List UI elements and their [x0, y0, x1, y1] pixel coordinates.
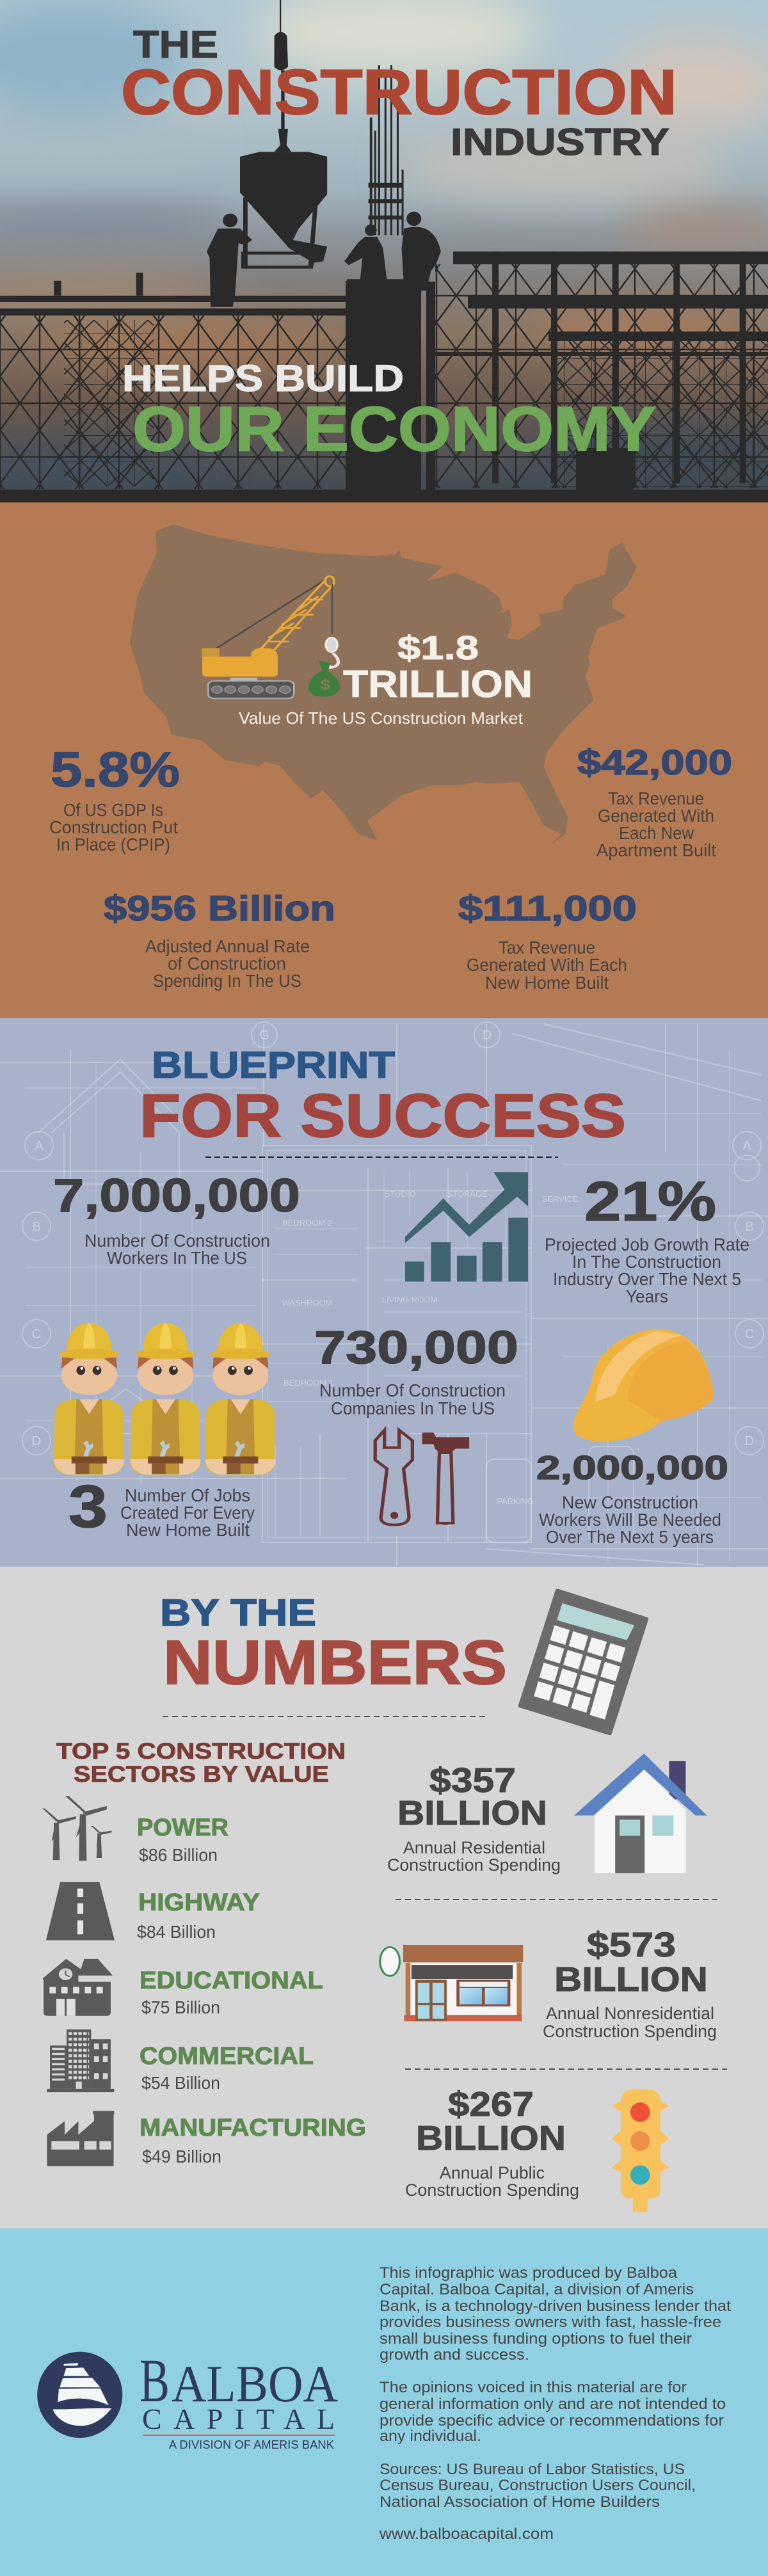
text block: about: growth and success. — [380, 2346, 529, 2364]
stat: jobs per new home: 3 — [68, 1473, 108, 1540]
stat: public spending: BILLION — [416, 2119, 566, 2157]
icon: factory — [47, 2111, 114, 2166]
stat: $111,000: Tax Revenue — [499, 938, 595, 957]
stat: jobs per new home: Created For Every — [120, 1503, 255, 1523]
stat: $42,000 — [577, 742, 732, 860]
subtitle: helps build: HELPS BUILD — [122, 358, 404, 399]
stat: job growth rate: In The Construction — [572, 1252, 721, 1272]
grid labels: D — [483, 1028, 492, 1043]
stat: $956 billion: of Construction — [168, 954, 286, 973]
heading: blueprint: BLUEPRINT — [152, 1044, 395, 1086]
text block: disclaimer: provide specific advice or recommendations for — [380, 2412, 724, 2429]
sector: power: POWER — [137, 1814, 228, 1841]
stat: residential spending: $357 — [429, 1761, 516, 1800]
stat: construction companies — [314, 1322, 518, 1418]
text block: disclaimer — [380, 2379, 726, 2445]
grid labels: SERVICE — [542, 1194, 579, 1204]
stat: nonresidential spending: Annual Nonresidential — [546, 2004, 714, 2023]
stat: $956 billion: $956 Billion — [104, 888, 335, 928]
grid labels: B — [745, 1220, 754, 1234]
text block: disclaimer: general information only and are not intended to — [380, 2396, 726, 2413]
stat: $42,000: $42,000 — [577, 742, 732, 782]
stat: market value: Value Of The US Construction Market — [239, 708, 524, 728]
website: www.balboacapital.com — [379, 2525, 554, 2543]
blueprint drawing background — [0, 1022, 768, 1566]
icon: wrench and hammer — [375, 1430, 469, 1525]
grid labels: STORAGE — [447, 1189, 488, 1199]
stat: job growth rate: Years — [626, 1286, 668, 1306]
text block: about: provides business owners with fast, hassle-free — [380, 2314, 721, 2331]
stat: $42,000: Tax Revenue — [608, 788, 704, 808]
sector: commercial: COMMERCIAL — [140, 2043, 314, 2070]
text block: sources: Sources: US Bureau of Labor Statistics, US — [380, 2461, 685, 2478]
logo: Balboa Capital: ALBOA — [172, 2355, 338, 2413]
stat: market value — [239, 630, 532, 728]
text block: about: Capital. Balboa Capital, a division of Ameris — [380, 2281, 694, 2298]
icon: wind turbines — [42, 1796, 111, 1861]
stat: new workers needed: Workers Will Be Needed — [539, 1510, 721, 1530]
stat: new workers needed — [536, 1450, 728, 1547]
stat: residential spending: Construction Spending — [387, 1855, 561, 1875]
subtitle: our economy: OUR ECONOMY — [132, 394, 656, 464]
panel: footer — [0, 2228, 768, 2576]
icon: ship emblem — [37, 2352, 122, 2438]
grid labels: B — [32, 1220, 41, 1234]
sky background — [0, 0, 768, 502]
icon: office buildings — [47, 2029, 114, 2092]
construction site silhouette — [0, 0, 768, 502]
stat: residential spending: BILLION — [397, 1794, 547, 1832]
title line: the: THE — [133, 23, 218, 66]
grid labels: C — [32, 1327, 41, 1341]
hero panel — [0, 0, 768, 502]
grid labels: BEDROOM 2 — [282, 1218, 332, 1228]
stat: construction workers: Number Of Construction — [84, 1231, 270, 1251]
icon: highway — [46, 1882, 115, 1940]
heading: for success: FOR SUCCESS — [140, 1082, 626, 1150]
stat: $42,000: Generated With — [598, 806, 714, 826]
text block: disclaimer: The opinions voiced in this material are for — [380, 2379, 687, 2396]
panel: blueprint for success — [0, 1018, 768, 1567]
sector: commercial — [47, 2029, 314, 2093]
stat: $956 billion: Adjusted Annual Rate — [145, 936, 310, 956]
grid labels: D — [32, 1434, 41, 1448]
text block: sources: Census Bureau, Construction Users Council, — [380, 2477, 696, 2494]
stat: public spending: Annual Public — [440, 2163, 545, 2182]
icon: house — [574, 1754, 707, 1873]
heading: by the: BY THE — [160, 1592, 316, 1634]
stat: market value: $1.8 — [397, 630, 479, 667]
stat: residential spending — [387, 1761, 561, 1875]
icon: three workers — [54, 1323, 276, 1475]
stat: nonresidential spending: BILLION — [554, 1960, 708, 1999]
icon: traffic light — [611, 2089, 669, 2212]
stat: jobs per new home — [68, 1473, 255, 1540]
sector: educational: $75 Billion — [141, 1997, 220, 2017]
grid labels: PARKING — [497, 1496, 534, 1506]
stat: new workers needed: New Construction — [562, 1492, 698, 1512]
stat: jobs per new home: Number Of Jobs — [125, 1485, 250, 1505]
stat: 5.8% of GDP: Of US GDP Is — [63, 800, 163, 820]
sector: highway: HIGHWAY — [138, 1889, 260, 1916]
stat: job growth rate: Industry Over The Next 5 — [553, 1269, 741, 1289]
text block: sources — [380, 2461, 696, 2511]
stat: $42,000: Each New — [619, 823, 694, 843]
icon: hard hat — [573, 1329, 714, 1442]
text block: disclaimer: any individual. — [380, 2428, 481, 2445]
stat: residential spending: Annual Residential — [403, 1838, 545, 1857]
grid labels: LIVING ROOM — [382, 1295, 437, 1304]
text block: about — [380, 2264, 731, 2364]
text block: about: This infographic was produced by Balboa — [380, 2264, 678, 2282]
grid labels: WASHROOM — [282, 1298, 332, 1308]
stat: $111,000: New Home Built — [485, 973, 609, 993]
sector: manufacturing: $49 Billion — [142, 2147, 221, 2166]
stat: 5.8% of GDP: In Place (CPIP) — [56, 835, 170, 854]
stat: $111,000: Generated With Each — [467, 955, 627, 975]
grid labels: A — [35, 1139, 44, 1153]
stat: construction companies: Companies In The US — [331, 1398, 495, 1418]
stat: jobs per new home: New Home Built — [126, 1520, 250, 1540]
stat: 5.8% of GDP: 5.8% — [51, 742, 180, 797]
panel: by the numbers — [0, 1567, 768, 2228]
sector: power: $86 Billion — [139, 1845, 218, 1865]
logo: Balboa Capital: CAPITAL — [142, 2403, 335, 2435]
sector: commercial: $54 Billion — [141, 2073, 220, 2093]
stat: 5.8% of GDP: Construction Put — [49, 817, 178, 837]
stat: nonresidential spending — [543, 1926, 717, 2041]
grid labels: STUDIO — [384, 1189, 416, 1199]
sector: educational — [43, 1959, 323, 2017]
stat: $956 billion — [104, 888, 335, 991]
grid labels: BEDROOM 1 — [284, 1378, 333, 1388]
stat: construction workers: 7,000,000 — [53, 1170, 300, 1222]
logo: Balboa Capital: A DIVISION OF AMERIS BANK — [169, 2438, 334, 2451]
heading: top 5 sectors: SECTORS BY VALUE — [74, 1762, 329, 1787]
grid labels: D — [745, 1434, 754, 1448]
title line: industry: INDUSTRY — [451, 121, 669, 163]
title — [121, 23, 677, 464]
stat: job growth rate — [545, 1171, 749, 1306]
logo: Balboa Capital — [37, 2346, 338, 2451]
stat: market value: TRILLION — [343, 663, 532, 705]
heading: top 5 sectors — [56, 1739, 346, 1787]
heading: numbers: NUMBERS — [163, 1628, 507, 1697]
stat: public spending: Construction Spending — [405, 2180, 579, 2200]
icon: growth chart — [405, 1172, 528, 1281]
icon: calculator — [520, 1590, 646, 1734]
stat: $956 billion: Spending In The US — [153, 971, 301, 991]
icon: school — [43, 1959, 113, 2016]
grid labels: G — [259, 1028, 269, 1043]
grid labels — [32, 1028, 754, 1506]
logo: Balboa Capital: B — [140, 2346, 170, 2415]
sector: manufacturing: MANUFACTURING — [140, 2115, 366, 2141]
stat: construction workers: Workers In The US — [107, 1248, 247, 1268]
panel: US construction market — [0, 502, 768, 1018]
stat: job growth rate: 21% — [584, 1171, 716, 1233]
sector: manufacturing — [47, 2111, 366, 2166]
stat: job growth rate: Projected Job Growth Rate — [545, 1235, 749, 1254]
grid labels: A — [742, 1139, 751, 1153]
icon: storefront — [380, 1945, 523, 2021]
stat: construction companies: Number Of Construction — [319, 1380, 506, 1400]
text block: about: small business funding options to fuel their — [380, 2330, 692, 2348]
stat: public spending — [405, 2085, 579, 2200]
sector: educational: EDUCATIONAL — [140, 1967, 323, 1994]
stat: $42,000: Apartment Built — [596, 840, 716, 860]
stat: construction companies: 730,000 — [314, 1322, 518, 1373]
icon: crane with money bag — [202, 576, 340, 698]
text block: sources: National Association of Home Builders — [380, 2493, 660, 2511]
stat: $111,000: $111,000 — [458, 888, 637, 928]
sector: highway: $84 Billion — [137, 1922, 216, 1942]
US map — [130, 524, 637, 845]
stat: new workers needed: 2,000,000 — [536, 1450, 728, 1487]
stat: $111,000 — [458, 888, 637, 993]
stat: new workers needed: Over The Next 5 years — [546, 1527, 714, 1547]
stat: 5.8% of GDP — [49, 742, 180, 854]
text block: about: Bank, is a technology-driven business lender that — [380, 2298, 731, 2315]
sector: power — [42, 1796, 228, 1865]
title line: construction: CONSTRUCTION — [121, 56, 677, 127]
stat: nonresidential spending: Construction Spending — [543, 2022, 717, 2041]
grid labels: C — [745, 1327, 754, 1341]
icon: crane with money bag: $ — [321, 677, 330, 692]
stat: nonresidential spending: $573 — [587, 1926, 676, 1964]
sector: highway — [46, 1882, 260, 1942]
stat: construction workers — [53, 1170, 300, 1268]
heading: top 5 sectors: TOP 5 CONSTRUCTION — [56, 1739, 346, 1764]
stat: public spending: $267 — [448, 2085, 534, 2124]
